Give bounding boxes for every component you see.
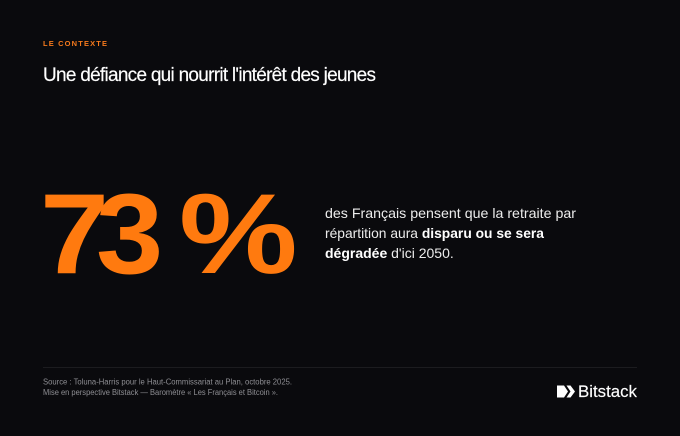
statistic description — [325, 205, 576, 261]
big statistic: 3 — [96, 170, 163, 297]
statistic description: des Français pensent que la retraite par — [325, 205, 576, 221]
logo: Bitstack — [557, 382, 637, 401]
icon: logo mark — [557, 386, 575, 398]
wordmark: Bitstack — [578, 382, 637, 401]
big statistic: % — [179, 171, 298, 298]
source note — [43, 378, 292, 397]
statistic description: répartition aura disparu ou se sera — [325, 225, 544, 241]
eyebrow label: LE CONTEXTE — [43, 39, 107, 48]
source note: Source : Toluna-Harris pour le Haut-Commissariat au Plan, octobre 2025. — [43, 378, 292, 386]
title: Une défiance qui nourrit l'intérêt des jeunes — [43, 65, 376, 86]
big statistic: 7 — [40, 171, 109, 298]
source note: Mise en perspective Bitstack — Baromètre « Les Français et Bitcoin ». — [43, 388, 278, 397]
big statistic — [40, 170, 298, 298]
statistic description: dégradée d'ici 2050. — [325, 245, 454, 261]
